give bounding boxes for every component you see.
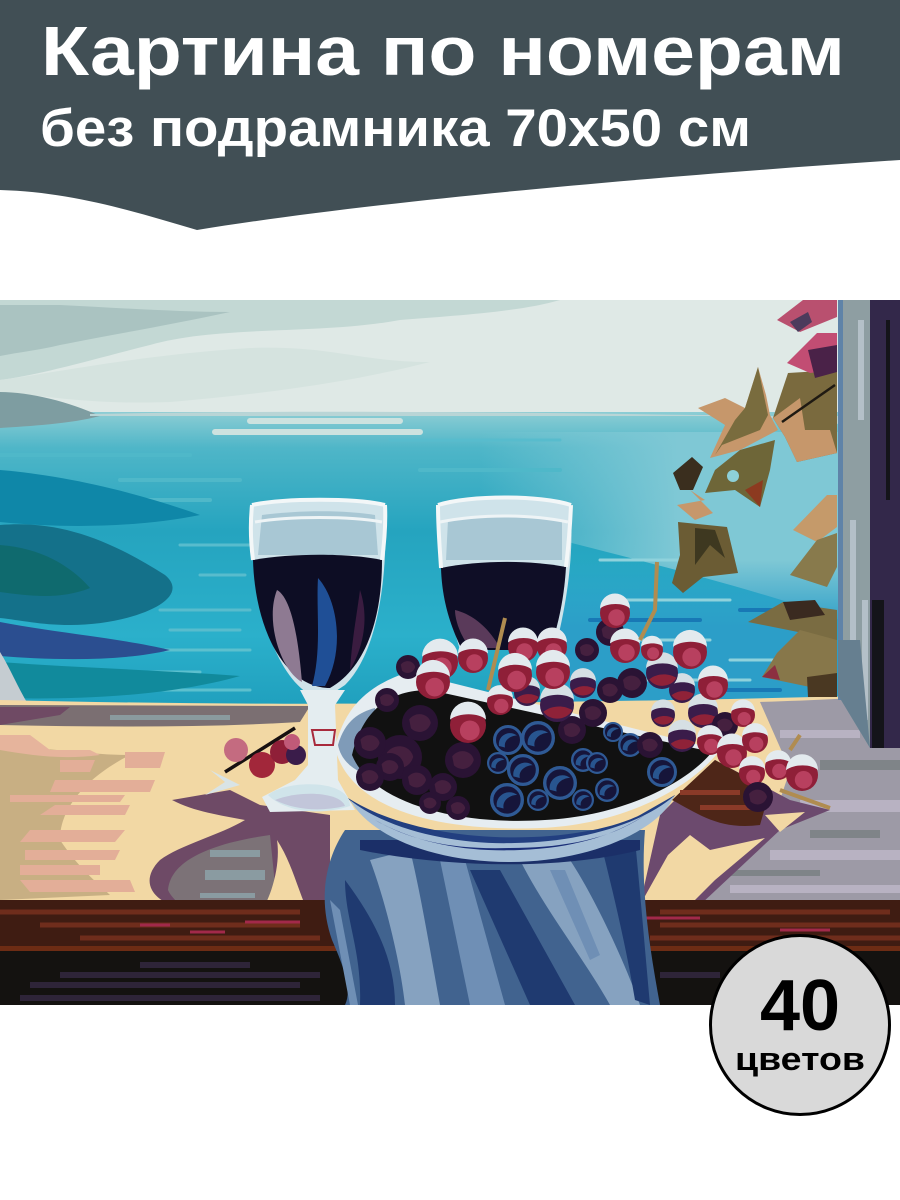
maple leaf upper centre: [698, 367, 778, 458]
grape stems: [488, 562, 830, 808]
painting: wine and grapes by the sea: [0, 300, 900, 1005]
title: Картина по номерам: [41, 12, 845, 90]
table top: [0, 696, 838, 900]
leaf right middle: [793, 495, 837, 542]
badge number: 40: [760, 966, 840, 1046]
badge: 40 colours: [710, 936, 890, 1114]
sea: [0, 412, 840, 710]
right shadow under bowl: [640, 760, 830, 905]
wine glass right: [438, 498, 572, 650]
clouds: [0, 300, 560, 403]
table front edge: [0, 900, 900, 946]
rock at left: [0, 652, 26, 701]
leaf right upper: [773, 370, 837, 462]
window frame: [838, 300, 900, 748]
header banner: [0, 0, 900, 230]
left glass shadow: [150, 790, 330, 908]
table right: [706, 698, 900, 900]
blue napkin: [325, 830, 660, 1005]
small grape bunch on the table: [205, 728, 306, 795]
distant hills: [0, 392, 100, 428]
vine leaves: [672, 300, 837, 697]
leaf hanging: [672, 522, 738, 593]
leaf middle dark: [705, 440, 775, 507]
leaf right lower: [748, 602, 837, 640]
subtitle: без подрамника 70х50 см: [40, 99, 751, 158]
table reflections: [0, 735, 165, 900]
sea highlights: [118, 418, 782, 692]
bowl: [335, 672, 720, 862]
sky: [8, 300, 838, 412]
grapes: [354, 562, 830, 820]
badge label: цветов: [735, 1041, 865, 1077]
wine glass left: [251, 500, 386, 812]
pink flowers: [777, 300, 837, 332]
dark water on the left: [0, 470, 200, 526]
